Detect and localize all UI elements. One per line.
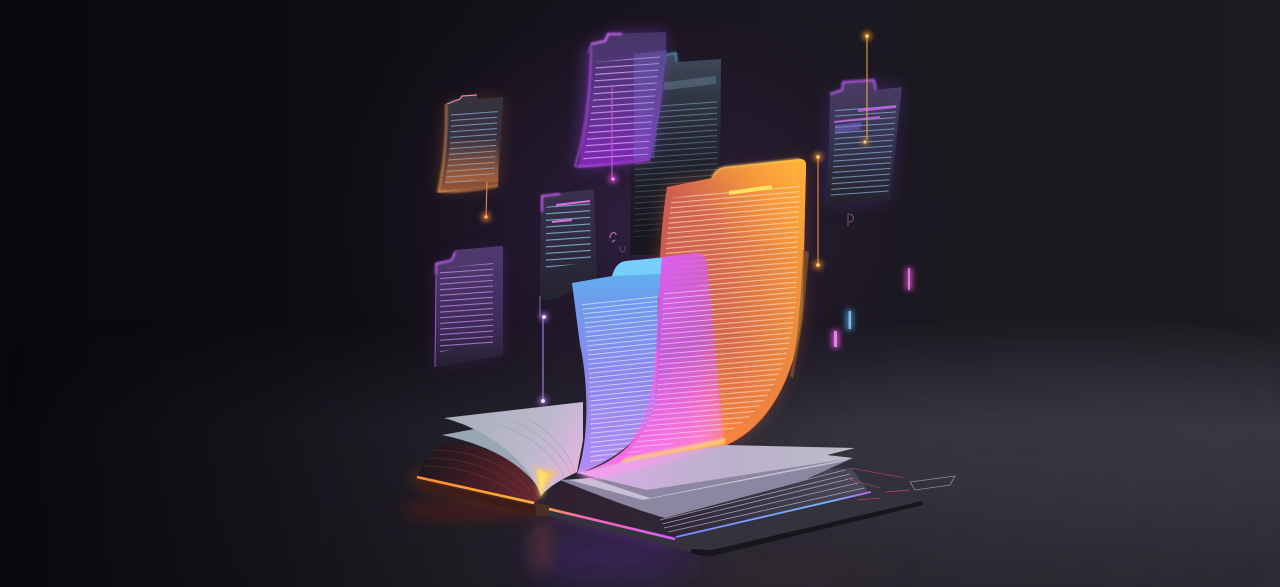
document: small center-left bbox=[540, 189, 597, 300]
glow behind large page bbox=[610, 159, 805, 472]
document: blue grey behind bbox=[630, 53, 722, 255]
right page block bbox=[549, 468, 869, 537]
pink light fold bbox=[590, 253, 726, 470]
small floating glyphs bbox=[610, 213, 912, 348]
right leaves bbox=[560, 458, 853, 518]
document: right purple-blue bbox=[825, 80, 902, 205]
blue page bbox=[572, 257, 665, 474]
book bbox=[415, 402, 955, 556]
large orange page bbox=[610, 159, 809, 472]
left page block bbox=[417, 443, 541, 503]
book glow edges bbox=[415, 477, 871, 538]
document: lower-left purple bbox=[435, 246, 503, 367]
connector lines and nodes bbox=[482, 32, 871, 405]
binding glow bbox=[535, 465, 560, 500]
document: purple top bbox=[575, 32, 667, 168]
spine bbox=[535, 503, 550, 516]
pink tablet marks bbox=[845, 468, 955, 500]
neon edges bbox=[417, 477, 534, 503]
floor glow under book bbox=[400, 500, 890, 580]
back cover bbox=[549, 489, 924, 555]
left leaves bbox=[442, 428, 541, 492]
document: small orange bbox=[438, 95, 503, 193]
